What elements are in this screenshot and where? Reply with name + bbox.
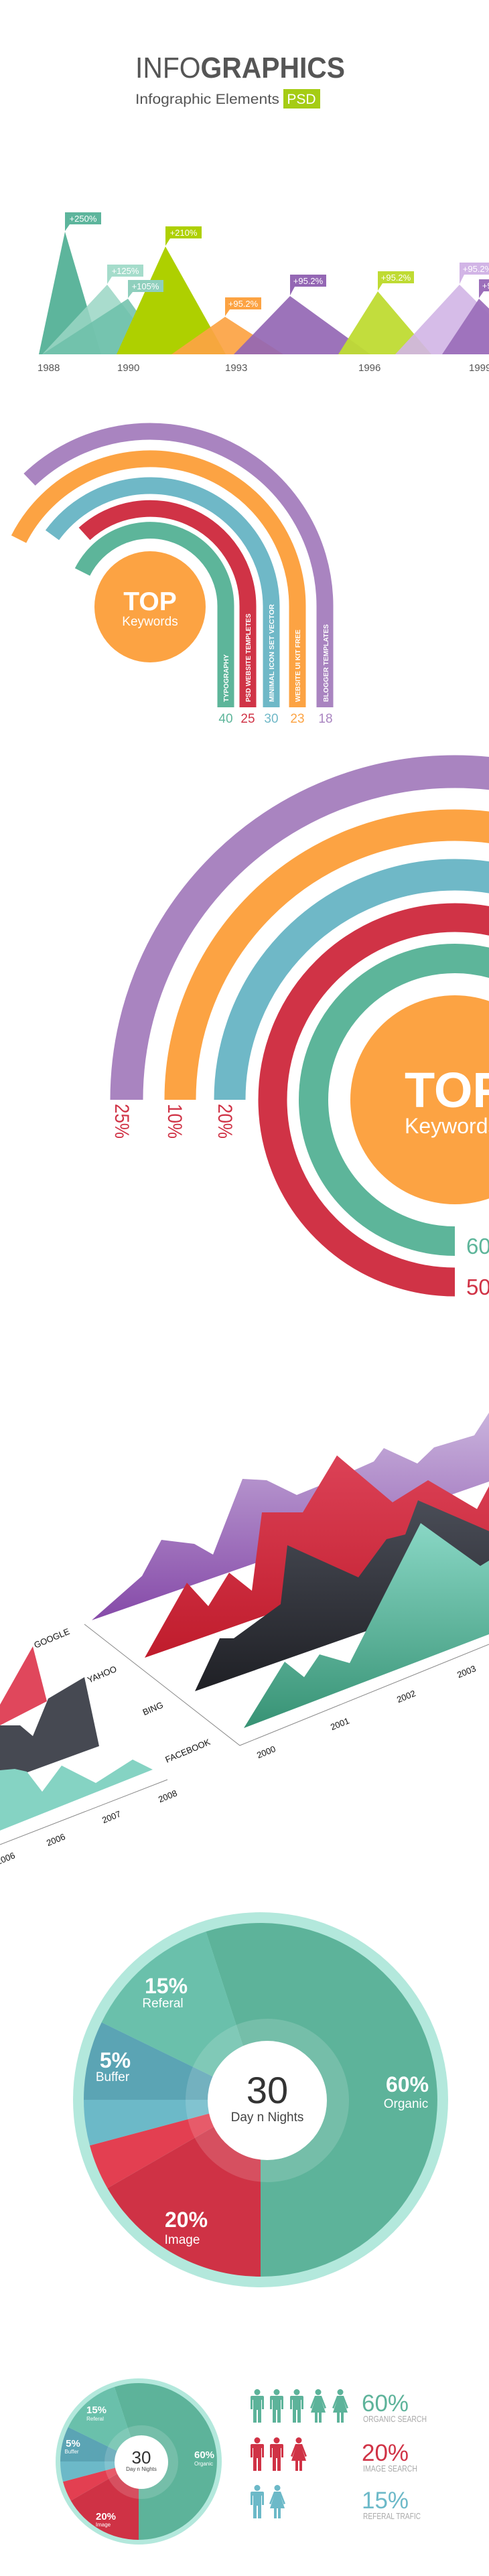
left panel year labels: [0, 1788, 179, 1867]
small donut labels: [64, 2405, 214, 2528]
chart labels: +95.2%: [228, 299, 259, 309]
donut slice labels: 20%: [165, 2208, 208, 2232]
small donut labels: 20%: [96, 2511, 116, 2522]
year axis labels: 1990: [117, 362, 139, 374]
keyword leg labels: PSD WEBSITE TEMPLETES: [245, 614, 253, 702]
stat: organic search: ORGANIC SEARCH: [363, 2414, 427, 2424]
stat: referal traffic: REFERAL TRAFIC: [363, 2511, 421, 2521]
stat: referal traffic: 15%: [362, 2488, 409, 2514]
keyword leg labels: WEBSITE UI KIT FREE: [295, 630, 302, 702]
3D chart year labels: [255, 1663, 478, 1760]
donut slice labels: 15%: [145, 1974, 188, 1998]
3D chart series labels: BING: [141, 1700, 165, 1717]
rotated percentage labels: 10%: [163, 1104, 186, 1139]
subtitle: Infographic Elements: [135, 92, 279, 107]
keyword arcs chart: [19, 431, 325, 707]
top keywords circle: Keywords: [122, 615, 178, 629]
small donut labels: Buffer: [64, 2449, 79, 2455]
left panel year labels: 2006: [45, 1831, 67, 1848]
small donut labels: 5%: [66, 2438, 80, 2449]
rotated percentage labels: [111, 1104, 236, 1139]
donut slice labels: Buffer: [96, 2070, 130, 2084]
stat: image search: IMAGE SEARCH: [363, 2463, 417, 2474]
3D chart year labels: 2003: [456, 1663, 478, 1680]
small donut labels: Referal: [86, 2416, 104, 2422]
donut slice labels: Referal: [142, 1997, 184, 2011]
keyword counts: 18: [318, 712, 333, 726]
rotated percentage labels: 20%: [214, 1104, 236, 1139]
small donut labels: 60%: [194, 2449, 214, 2461]
year axis labels: 1988: [38, 362, 60, 374]
chart labels: +95.2%: [293, 276, 324, 286]
stat: organic search: 60%: [362, 2390, 409, 2417]
3D chart year labels: 2001: [329, 1715, 351, 1732]
keyword leg labels: BLOGGER TEMPLATES: [323, 624, 330, 702]
people icons row: image: [251, 2437, 307, 2471]
people icons row: referal: [251, 2485, 285, 2518]
donut center text: Day n Nights: [231, 2110, 303, 2125]
donut slice labels: [96, 1974, 429, 2247]
ring end labels: [466, 1234, 489, 1299]
donut slice labels: 60%: [386, 2072, 429, 2096]
3D chart series labels: FACEBOOK: [163, 1737, 212, 1765]
keyword leg labels: [223, 603, 330, 702]
keyword counts: 25: [240, 712, 255, 726]
small donut labels: Organic: [194, 2461, 213, 2467]
left panel year labels: 2007: [100, 1808, 123, 1825]
3D chart left panel: [0, 1646, 167, 1845]
donut center text: [231, 2069, 303, 2125]
donut slice labels: Image: [165, 2233, 200, 2247]
small donut chart: 30: [132, 2447, 151, 2467]
left panel year labels: 2008: [157, 1788, 179, 1804]
large donut chart: [73, 1912, 448, 2287]
small donut chart: Day n Nights: [126, 2466, 157, 2472]
top keywords circle: [94, 551, 206, 662]
chart labels: +105%: [132, 281, 159, 291]
stat: referal traffic: [362, 2488, 421, 2521]
chart labels: [65, 212, 489, 316]
chart labels: +95.2%: [381, 273, 411, 283]
keyword leg labels: TYPOGRAPHY: [223, 654, 230, 702]
chart labels: +250%: [70, 214, 97, 224]
large arcs chart: [127, 772, 489, 1282]
top keywords circle: TOP: [123, 587, 177, 616]
3D area chart: [84, 1413, 489, 1745]
stat: image search: 20%: [362, 2440, 409, 2466]
donut slice labels: 5%: [100, 2048, 131, 2072]
chart labels: +125%: [112, 266, 139, 276]
stat: image search: [362, 2440, 417, 2474]
chart labels: +210%: [170, 228, 198, 238]
rotated percentage labels: 25%: [111, 1104, 133, 1139]
year axis labels: [38, 362, 489, 374]
badge: PSD: [283, 89, 320, 109]
donut slice labels: Organic: [384, 2097, 428, 2111]
keyword counts: [218, 712, 333, 726]
donut center text: 30: [247, 2069, 288, 2111]
3D chart series labels: YAHOO: [86, 1664, 118, 1685]
small donut labels: 15%: [86, 2405, 107, 2416]
title: INFOGRAPHICS: [135, 52, 345, 84]
chart: triangle peaks: [39, 232, 489, 354]
small donut chart: [56, 2378, 222, 2545]
keyword leg labels: MINIMAL ICON SET VECTOR: [269, 603, 276, 702]
3D chart series labels: GOOGLE: [32, 1626, 71, 1650]
keyword counts: 30: [264, 712, 279, 726]
3D chart year labels: 2000: [255, 1743, 277, 1760]
people icons row: organic: [251, 2389, 348, 2423]
keyword counts: 23: [290, 712, 305, 726]
year axis labels: 1996: [358, 362, 380, 374]
badge: PSD: PSD: [287, 92, 316, 107]
keyword counts: 40: [218, 712, 233, 726]
small donut labels: Image: [96, 2522, 111, 2528]
year axis labels: 1993: [225, 362, 247, 374]
stat: organic search: [362, 2390, 427, 2424]
large top keywords circle: [350, 995, 489, 1204]
3D chart year labels: 2002: [395, 1688, 417, 1705]
3D chart series labels: [32, 1626, 212, 1765]
